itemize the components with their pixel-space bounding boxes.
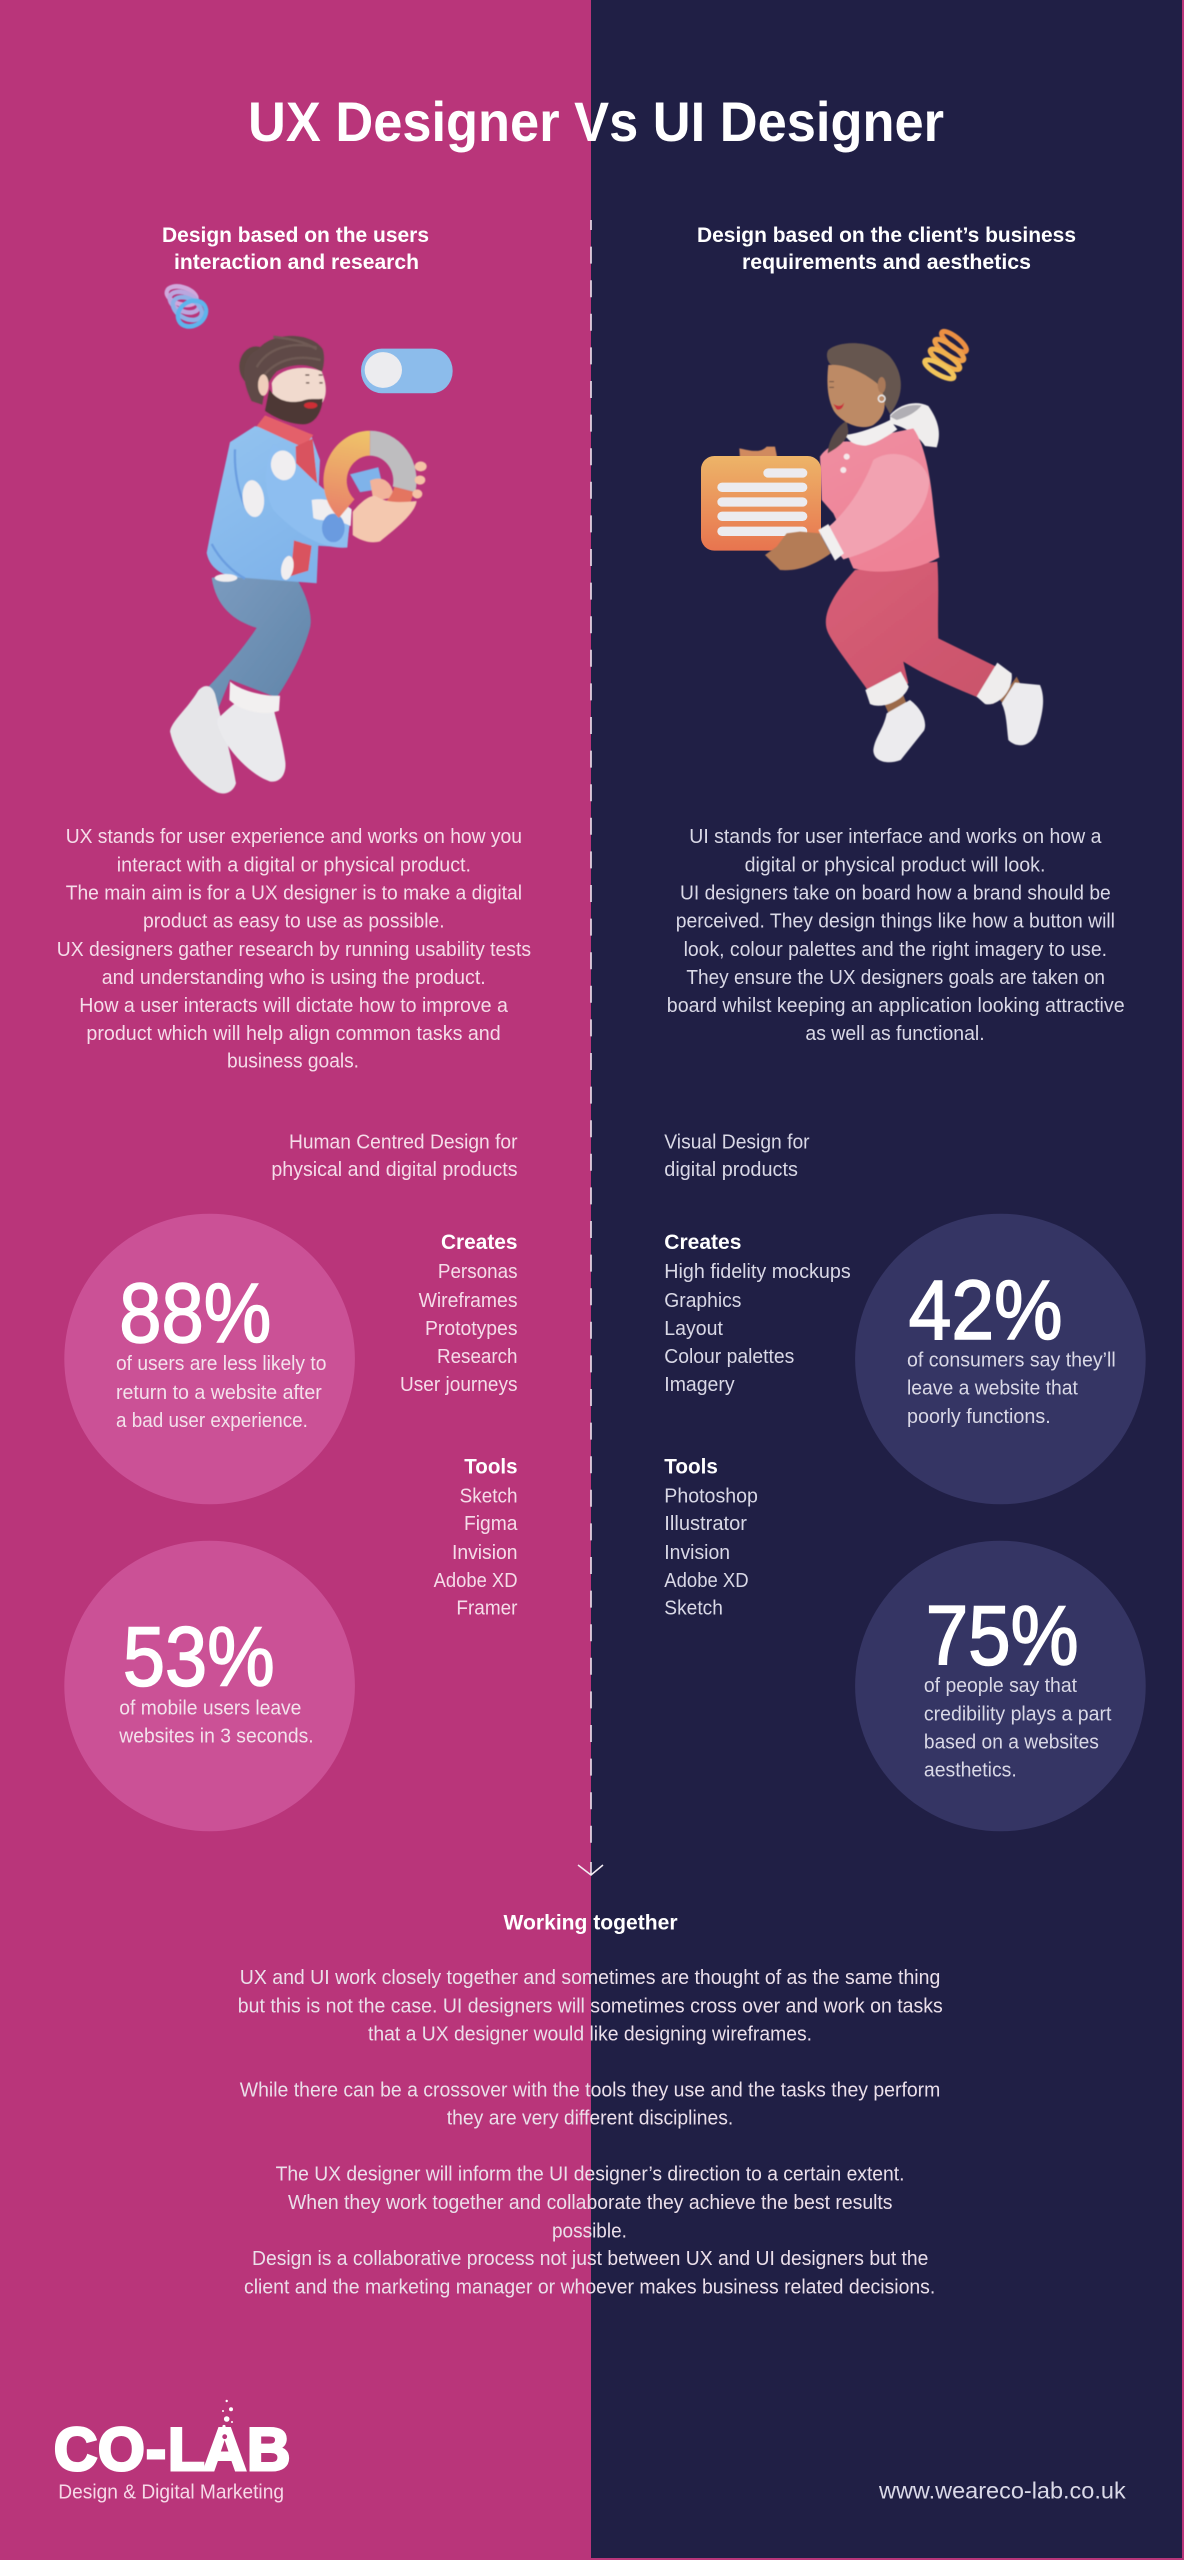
UX discipline summary: Human Centred Design for — [289, 1131, 518, 1153]
stat circle: 53%: of mobile users leave — [119, 1697, 301, 1719]
UX discipline summary: physical and digital products — [271, 1159, 518, 1181]
stat circle: 42%: 42% — [909, 1263, 1062, 1357]
UI description: as well as functional. — [805, 1023, 985, 1045]
UI discipline summary: Visual Design for — [664, 1131, 810, 1153]
stat circle: 75%: based on a websites — [924, 1732, 1099, 1754]
stat circle: 75%: of people say that — [924, 1675, 1077, 1697]
panel: UI tools list: Photoshop — [664, 1485, 758, 1507]
UI description: UI stands for user interface and works on how a — [689, 826, 1102, 848]
UX description: and understanding who is using the product. — [102, 967, 486, 989]
UX subheading — [162, 224, 429, 274]
text block: working together body: but this is not the case. UI designers will sometimes cross over and work on tasks — [238, 1995, 943, 2017]
panel: UX tools list: Invision — [452, 1542, 518, 1564]
panel: UI tools list — [664, 1456, 758, 1620]
logo: CO-LAB: CO-LAB — [54, 2416, 290, 2483]
panel: UI creates list: Graphics — [664, 1290, 741, 1312]
panel: UX creates list: Prototypes — [425, 1318, 518, 1340]
panel: UI creates list: Creates — [664, 1231, 741, 1254]
UX description: UX designers gather research by running usability tests — [57, 939, 531, 961]
panel: UX creates list: Wireframes — [419, 1290, 518, 1312]
panel: UI tools list: Sketch — [664, 1598, 723, 1620]
stat circle: 88%: a bad user experience. — [116, 1410, 308, 1432]
text block: working together body: The UX designer will inform the UI designer’s direction to a certain extent. — [276, 2164, 905, 2186]
stat circle: 75%: credibility plays a part — [924, 1703, 1112, 1725]
UI discipline summary — [664, 1131, 810, 1181]
panel: UX tools list: Framer — [456, 1598, 518, 1620]
UI subheading: requirements and aesthetics — [742, 251, 1031, 274]
stat circle: 75% — [855, 1541, 1146, 1831]
logo tagline: Design & Digital Marketing — [58, 2481, 284, 2503]
UX description: UX stands for user experience and works on how you — [66, 826, 522, 848]
woman's hand and cuff — [765, 524, 844, 570]
panel: UX tools list: Sketch — [460, 1485, 518, 1507]
text block: working together body: Design is a collaborative process not just between UX and UI designers but the — [252, 2248, 928, 2270]
panel: UI tools list: Illustrator — [664, 1513, 747, 1535]
heading: working together: Working together — [504, 1911, 678, 1934]
illustration: UX designer man with donut chart — [165, 283, 453, 794]
stat circle: 75%: 75% — [926, 1588, 1079, 1682]
stat circle: 53%: websites in 3 seconds. — [118, 1725, 314, 1747]
panel: UX creates list: Creates — [441, 1231, 518, 1254]
UI description: board whilst keeping an application looking attractive — [667, 995, 1125, 1017]
UX description: How a user interacts will dictate how to improve a — [79, 995, 509, 1017]
panel: UI creates list — [664, 1231, 851, 1396]
stat circle: 53%: 53% — [123, 1610, 275, 1704]
UX description: business goals. — [227, 1050, 359, 1072]
UX discipline summary — [271, 1131, 518, 1181]
stat circle: 88% — [64, 1214, 355, 1504]
woman figure — [739, 343, 1043, 762]
text block: working together body: possible. — [552, 2220, 627, 2242]
text block: working together body: that a UX designer would like designing wireframes. — [368, 2023, 812, 2045]
background: navy UI side — [591, 0, 1182, 2558]
stat circle: 53% — [64, 1541, 355, 1831]
panel: UX creates list — [400, 1231, 518, 1396]
text block: working together body: UX and UI work closely together and sometimes are thought of as the same thing — [240, 1967, 940, 1989]
UI description: They ensure the UX designers goals are taken on — [686, 967, 1105, 989]
panel: UI tools list: Tools — [664, 1456, 718, 1478]
text block: working together body: While there can be a crossover with the tools they use and the tasks they perform — [240, 2080, 940, 2102]
title: UX Designer Vs UI Designer — [248, 90, 944, 153]
arrow: down chevron — [578, 1862, 603, 1875]
panel: UX creates list: User journeys — [400, 1374, 518, 1396]
stat circle: 88%: of users are less likely to — [116, 1353, 326, 1375]
UI description: perceived. They design things like how a button will — [676, 910, 1115, 932]
text block: working together body: client and the marketing manager or whoever makes business related decisions. — [244, 2276, 935, 2298]
icon: content card — [701, 456, 821, 551]
icon: spring coil — [165, 283, 210, 331]
icon: orange spring coil — [922, 328, 969, 382]
text block: working together body: they are very different disciplines. — [447, 2108, 733, 2130]
UI subheading: Design based on the client’s business — [697, 224, 1076, 247]
stat circle: 42%: poorly functions. — [907, 1406, 1051, 1428]
panel: UX creates list: Research — [437, 1346, 518, 1368]
panel: UX tools list: Figma — [464, 1513, 518, 1535]
UX description: The main aim is for a UX designer is to make a digital — [66, 882, 522, 904]
logo: CO-LAB — [54, 2400, 290, 2503]
stat circle: 42%: of consumers say they’ll — [907, 1350, 1116, 1372]
stat circle: 75%: aesthetics. — [924, 1759, 1017, 1781]
panel: UX tools list — [434, 1456, 518, 1620]
UI discipline summary: digital products — [664, 1159, 798, 1181]
stat circle: 88%: 88% — [119, 1266, 271, 1360]
text block: working together body — [238, 1967, 943, 2298]
UX subheading: Design based on the users — [162, 224, 429, 247]
panel: UI creates list: Imagery — [664, 1374, 735, 1396]
UX subheading: interaction and research — [174, 251, 419, 274]
website URL: www.weareco-lab.co.uk — [878, 2478, 1126, 2504]
stat circle: 42% — [855, 1214, 1146, 1504]
icon: toggle switch — [361, 349, 453, 393]
UX description — [57, 826, 531, 1072]
stat circle: 88%: return to a website after — [116, 1382, 322, 1404]
text block: working together body: When they work together and collaborate they achieve the best results — [288, 2192, 892, 2214]
panel: UI creates list: Layout — [664, 1318, 723, 1340]
man figure — [170, 336, 427, 794]
panel: UX tools list: Adobe XD — [434, 1570, 518, 1592]
UI description: digital or physical product will look. — [745, 854, 1045, 876]
UX description: product which will help align common tasks and — [86, 1023, 501, 1045]
panel: UI tools list: Invision — [664, 1542, 730, 1564]
panel: UI tools list: Adobe XD — [664, 1570, 749, 1592]
UI description: look, colour palettes and the right imagery to use. — [684, 939, 1107, 961]
panel: UX creates list: Personas — [438, 1261, 518, 1283]
UI description — [667, 826, 1125, 1045]
illustration: UI designer woman with content card — [701, 328, 1043, 762]
stat circle: 42%: leave a website that — [907, 1378, 1078, 1400]
panel: UI creates list: High fidelity mockups — [664, 1261, 851, 1283]
UI description: UI designers take on board how a brand should be — [680, 882, 1111, 904]
panel: UX tools list: Tools — [464, 1456, 518, 1478]
UX description: interact with a digital or physical product. — [117, 854, 471, 876]
UX description: product as easy to use as possible. — [143, 910, 445, 932]
panel: UI creates list: Colour palettes — [664, 1346, 794, 1368]
UI subheading — [697, 224, 1076, 274]
centre dashed divider — [590, 220, 592, 1846]
